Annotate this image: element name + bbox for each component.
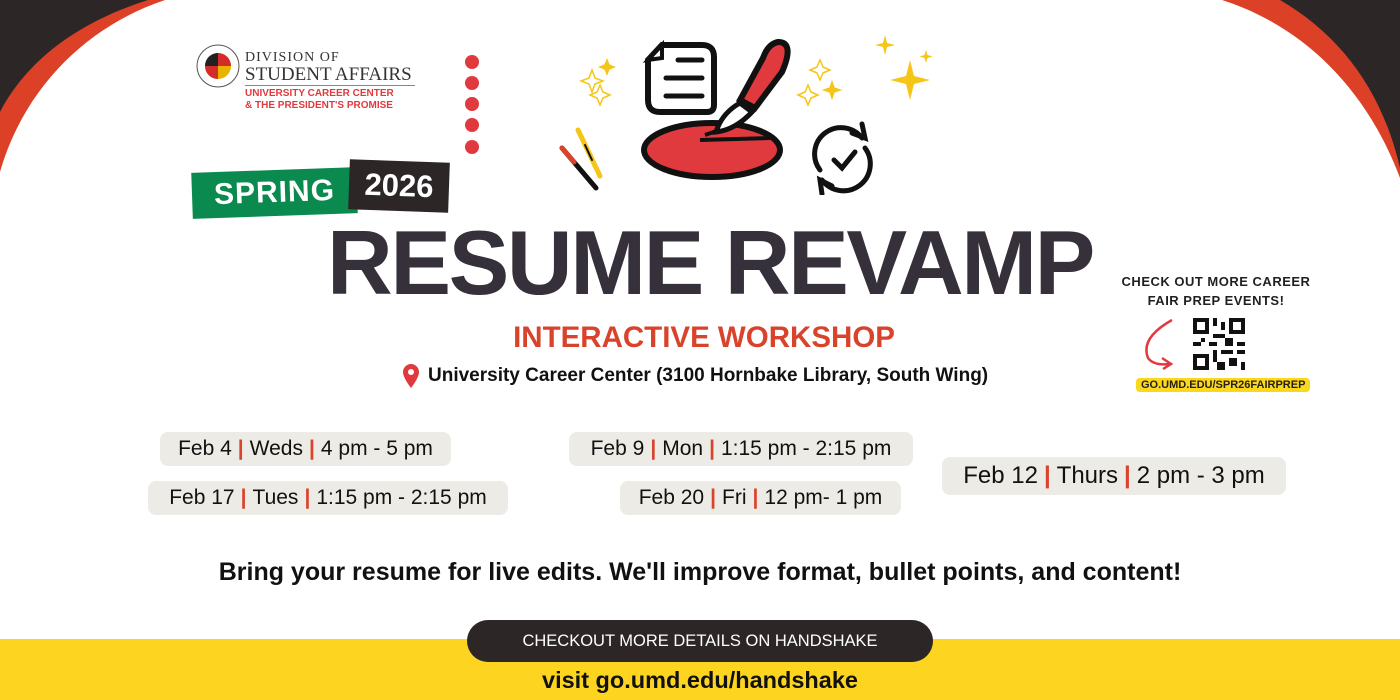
- icon: location pin: [403, 364, 419, 388]
- badge: spring 2026: 2026: [364, 167, 434, 204]
- qr panel: CHECK OUT MORE CAREER: [1122, 274, 1310, 289]
- pill: feb 12: |: [1124, 462, 1131, 489]
- icon: sparkles left: [581, 60, 614, 105]
- icon: refresh check: [815, 124, 870, 194]
- icon: paint splat and brush: [644, 123, 780, 177]
- footer band: [0, 639, 1400, 700]
- location: University Career Center (3100 Hornbake Library, South Wing): [428, 365, 988, 386]
- logo: division of student affairs: [196, 44, 415, 111]
- pill: feb 12: |: [1044, 462, 1051, 489]
- qr panel: FAIR PREP EVENTS!: [1148, 293, 1284, 308]
- icon: pens: [562, 130, 600, 188]
- corner decoration: top-left: [0, 0, 165, 172]
- badge: spring 2026: [191, 159, 450, 219]
- pill: feb 20: Feb 20 Fri 12 pm- 1 pm: [639, 486, 882, 509]
- icon: university seal: [196, 44, 240, 88]
- pill: feb 20: |: [710, 486, 716, 509]
- icon: sparkles right: [875, 35, 932, 100]
- subtitle: INTERACTIVE WORKSHOP: [513, 321, 895, 354]
- pill: feb 20: [620, 481, 901, 515]
- pill: feb 17: |: [241, 486, 247, 509]
- logo: division of student affairs: DIVISION OF: [245, 50, 340, 65]
- pill: feb 12: Feb 12 Thurs 2 pm - 3 pm: [963, 462, 1265, 489]
- pill: feb 17: [148, 481, 508, 515]
- qr panel: [1122, 274, 1310, 392]
- badge: spring 2026: SPRING: [213, 174, 336, 211]
- button: handshake: CHECKOUT MORE DETAILS ON HANDSHAKE: [522, 632, 878, 650]
- pill: feb 12: [942, 457, 1286, 495]
- tagline: Bring your resume for live edits. We'll improve format, bullet points, and content!: [219, 558, 1181, 586]
- icon: qr code: [1193, 318, 1245, 370]
- icon: document: [648, 45, 714, 112]
- pill: feb 4: |: [309, 437, 315, 460]
- icon: red arrow: [1145, 318, 1174, 370]
- title: RESUME REVAMP: [327, 213, 1093, 314]
- pill: feb 9: [569, 432, 913, 466]
- red dots: [465, 55, 479, 154]
- footer link: visit go.umd.edu/handshake: [542, 667, 858, 693]
- logo: division of student affairs: STUDENT AFFAIRS: [245, 64, 412, 85]
- corner decoration: top-right: [1222, 0, 1400, 178]
- pill: feb 17: |: [304, 486, 310, 509]
- logo: division of student affairs: & THE PRESIDENT'S PROMISE: [245, 100, 393, 111]
- pill: feb 9: Feb 9 Mon 1:15 pm - 2:15 pm: [591, 437, 891, 460]
- pill: feb 4: [160, 432, 451, 466]
- illustration: resume and paintbrush: [560, 35, 932, 195]
- pill: feb 20: |: [752, 486, 758, 509]
- pill: feb 9: |: [650, 437, 656, 460]
- button: handshake: [467, 620, 933, 662]
- logo: division of student affairs: UNIVERSITY CAREER CENTER: [245, 88, 394, 99]
- pill: feb 9: |: [709, 437, 715, 460]
- pill: feb 4: |: [238, 437, 244, 460]
- pill: feb 17: Feb 17 Tues 1:15 pm - 2:15 pm: [169, 486, 487, 509]
- link label: GO.UMD.EDU/SPR26FAIRPREP: [1141, 379, 1305, 391]
- pill: feb 4: Feb 4 Weds 4 pm - 5 pm: [178, 437, 433, 460]
